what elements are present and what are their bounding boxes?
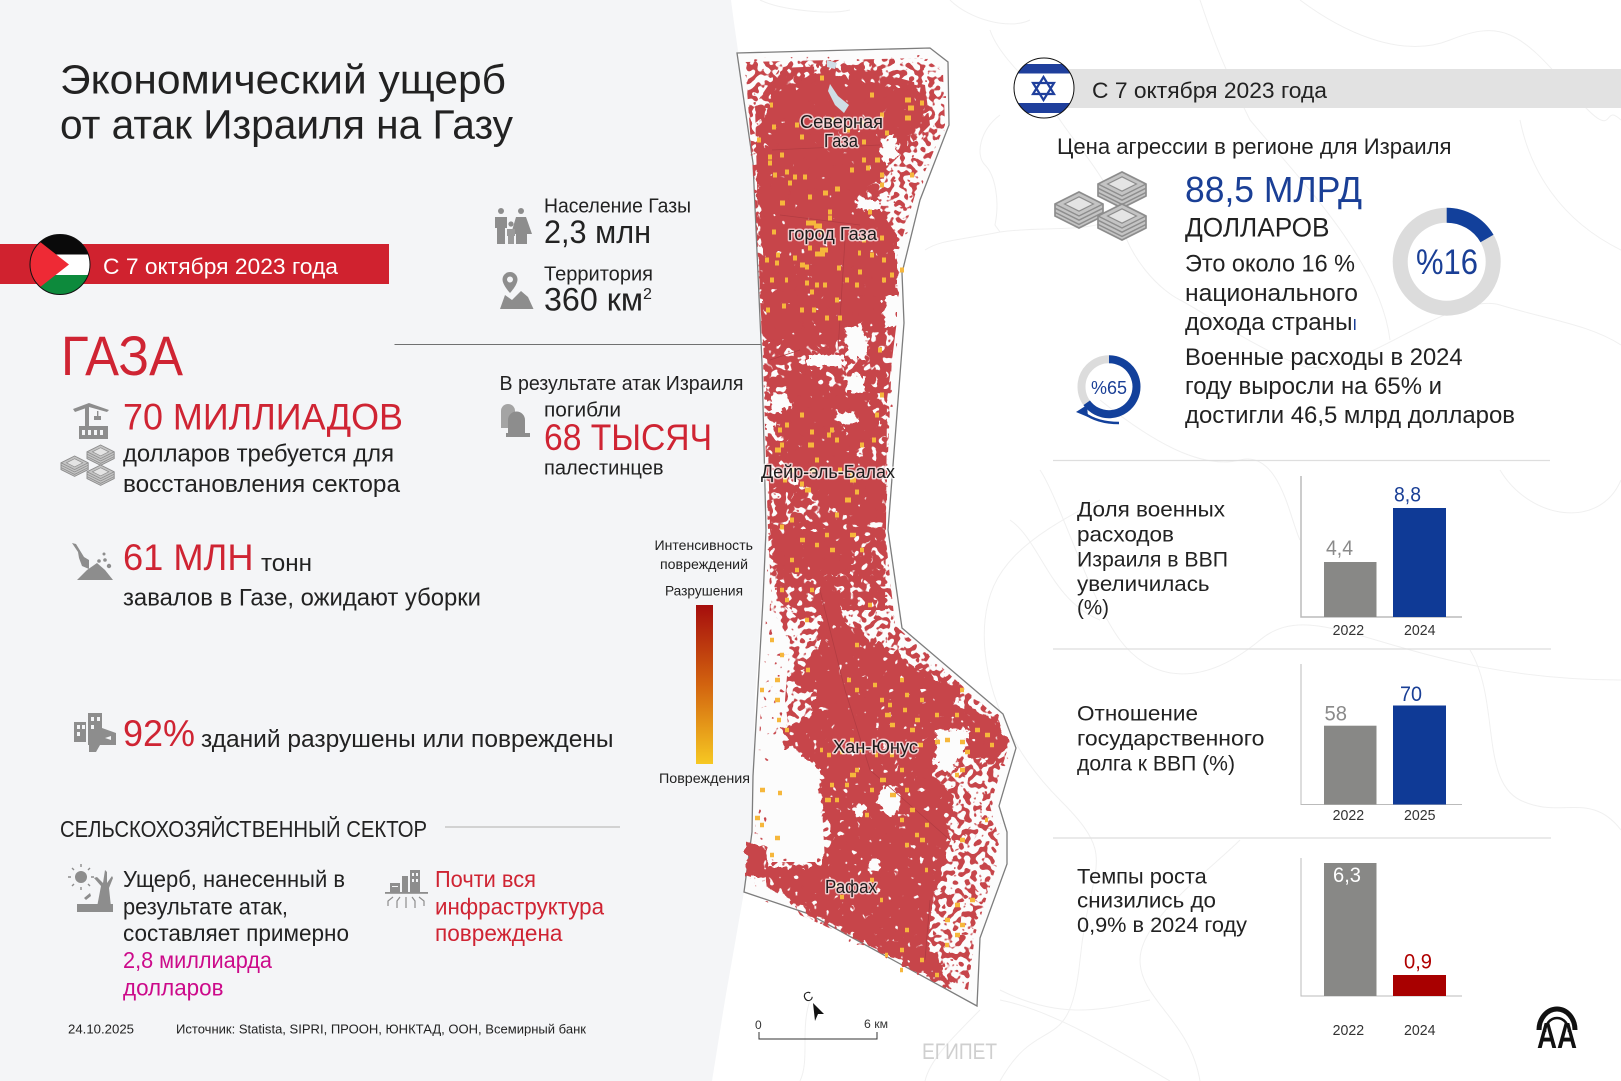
- heading: agricultural sector: СЕЛЬСКОХОЗЯЙСТВЕННЫЙ СЕКТОР: [60, 815, 427, 842]
- stat: buildings destroyed: [123, 713, 614, 754]
- donut chart: 65 percent: %65: [1091, 378, 1127, 398]
- title: [60, 56, 513, 148]
- map: Gaza Strip damage: [737, 48, 1016, 1006]
- stat: population: 2,3 млн: [544, 214, 651, 250]
- road traces: [770, 145, 950, 960]
- bar chart: public debt: [1301, 664, 1462, 824]
- stat: 88.5 billion: ДОЛЛАРОВ: [1185, 213, 1330, 243]
- icon: money stacks: [61, 445, 114, 485]
- bar chart: military share of GDP: [1301, 476, 1462, 639]
- legend: damage intensity: повреждений: [660, 556, 748, 572]
- icon: damaged buildings: [74, 713, 116, 752]
- icon: infrastructure: [385, 870, 428, 908]
- stat: deaths: погибли: [544, 399, 621, 422]
- stat: 70 billion: [123, 396, 403, 498]
- text: agricultural damage: Ущерб, нанесенный в: [123, 866, 345, 892]
- stat: 70 billion: долларов требуется для: [123, 440, 394, 468]
- date and source: 24.10.2025: [68, 1022, 134, 1036]
- title: от атак Израиля на Газу: [60, 102, 513, 148]
- legend: damage intensity: [654, 537, 753, 786]
- icon: burnt tree and sun: [68, 864, 113, 912]
- sparse damage layer: [742, 55, 1012, 1000]
- banner: Gaza date: С 7 октября 2023 года: [103, 254, 339, 279]
- stat: territory: 2: [643, 286, 652, 303]
- town labels: город Газа: [788, 224, 878, 244]
- background road map: [760, 0, 1621, 1081]
- divider line: [394, 344, 823, 346]
- stat: deaths: 68 ТЫСЯЧ: [544, 417, 712, 458]
- map scale bar and north arrow: 0: [755, 1018, 762, 1032]
- text: military share of GDP: [1077, 498, 1228, 619]
- text: infrastructure damage: инфраструктура: [435, 893, 604, 919]
- stat: 88.5 billion: 88,5 МЛРД: [1185, 169, 1362, 210]
- title: Экономический ущерб: [60, 56, 506, 102]
- stat: deaths: палестинцев: [544, 456, 664, 480]
- map scale bar and north arrow: С: [801, 988, 815, 1005]
- text: public debt: долга к ВВП (%): [1077, 751, 1235, 775]
- bar chart: growth rate: 6,3: [1333, 864, 1361, 887]
- stat: deaths: В результате атак Израиля: [500, 372, 744, 395]
- icon: location on map: [500, 272, 534, 309]
- text: military share of GDP: (%): [1077, 595, 1109, 619]
- bar chart: military share of GDP: 2024: [1404, 622, 1436, 639]
- bar chart: military share of GDP: 2022: [1333, 622, 1364, 639]
- stat: 70 billion: восстановления сектора: [123, 471, 401, 498]
- map scale bar and north arrow: [755, 988, 888, 1039]
- text: agricultural damage: составляет примерно: [123, 920, 349, 946]
- water bodies: [827, 60, 849, 113]
- stat: rubble: 61 МЛН: [123, 537, 254, 578]
- text: public debt: Отношение: [1077, 702, 1198, 726]
- text: agricultural damage: [123, 866, 349, 1000]
- text: growth rate: 0,9% в 2024 году: [1077, 913, 1247, 937]
- logo: Anadolu Agency: [1537, 1009, 1577, 1056]
- text: military share of GDP: увеличилась: [1077, 572, 1210, 596]
- bar chart: military share of GDP: 4,4: [1326, 537, 1353, 560]
- legend: damage intensity: Повреждения: [659, 770, 750, 786]
- bar chart: public debt: 2025: [1404, 807, 1436, 824]
- stat: population: [544, 194, 691, 250]
- text: growth rate: [1077, 864, 1247, 937]
- stat: rubble: тонн: [261, 550, 312, 577]
- donut chart: 16 percent: %16: [1416, 243, 1478, 282]
- stat: deaths: [500, 372, 744, 480]
- logo: Anadolu Agency: AA: [1537, 1015, 1577, 1056]
- icon: money stacks: [1055, 172, 1146, 240]
- icon: family: [495, 208, 532, 244]
- text: growth rate: Темпы роста: [1077, 864, 1207, 888]
- legend: damage intensity: Разрушения: [665, 582, 743, 598]
- banner: Israel date: С 7 октября 2023 года: [1092, 78, 1328, 103]
- yellow damage markers: [757, 78, 924, 527]
- map outline: [737, 48, 1016, 1006]
- icon: crane and building: [73, 403, 109, 439]
- icon: shovel and rubble: [72, 543, 113, 580]
- stat: 88.5 billion: Это около 16 %: [1185, 251, 1355, 278]
- icon: tombstones: [501, 404, 530, 437]
- icon: Palestinian flag: [30, 234, 90, 296]
- text: agricultural damage: 2,8 миллиарда: [123, 947, 272, 973]
- text: military spending: году выросли на 65% и: [1185, 373, 1442, 400]
- town labels: Газа: [824, 131, 859, 151]
- bar chart: public debt: 58: [1324, 703, 1347, 726]
- banner: Israel date: [1044, 69, 1621, 108]
- banner: Gaza date: [0, 244, 389, 284]
- stat: 88.5 billion: национального: [1185, 280, 1358, 307]
- bar chart: growth rate: [1301, 858, 1462, 1039]
- bar chart: growth rate: 0,9: [1404, 950, 1432, 974]
- text: military share of GDP: расходов: [1077, 522, 1174, 546]
- bar chart: growth rate: 2024: [1404, 1022, 1436, 1039]
- stat: territory: Территория: [544, 262, 653, 286]
- town labels: Хан-Юнус: [833, 737, 918, 757]
- text: agricultural damage: результате атак,: [123, 893, 288, 919]
- stat: rubble: завалов в Газе, ожидают уборки: [123, 584, 481, 612]
- stat: population: Население Газы: [544, 194, 691, 218]
- stat: buildings destroyed: зданий разрушены или повреждены: [201, 726, 614, 753]
- town labels: Рафах: [825, 877, 877, 897]
- text: military share of GDP: Доля военных: [1077, 498, 1225, 522]
- icon: Israeli flag: [1014, 58, 1074, 118]
- left panel background: [0, 0, 767, 1081]
- text: public debt: [1077, 702, 1264, 775]
- stat: 70 billion: 70 МИЛЛИАДОВ: [123, 396, 403, 438]
- date and source: Источник: Statista, SIPRI, ПРООН, ЮНКТАД, ООН, Всемирный банк: [176, 1022, 586, 1036]
- heading: Gaza: ГАЗА: [61, 324, 184, 387]
- core damage layer: [747, 75, 1010, 987]
- text: infrastructure damage: Почти вся: [435, 866, 536, 892]
- stat: territory: [544, 262, 653, 318]
- label: Egypt: ЕГИПЕТ: [922, 1039, 997, 1064]
- bar chart: growth rate: 2022: [1333, 1022, 1364, 1039]
- text: military share of GDP: Израиля в ВВП: [1077, 547, 1228, 571]
- cleared areas: [758, 135, 968, 871]
- donut chart: 16 percent: [1400, 215, 1493, 308]
- town labels: Дейр-эль-Балах: [761, 462, 895, 482]
- text: military spending: достигли 46,5 млрд долларов: [1185, 402, 1515, 429]
- dense damage layer: [755, 65, 930, 620]
- bar chart: public debt: 70: [1400, 683, 1422, 706]
- text: agricultural damage: долларов: [123, 974, 224, 1000]
- text: military spending: Военные расходы в 2024: [1185, 344, 1463, 371]
- bar chart: public debt: 2022: [1333, 807, 1364, 824]
- text: military spending: [1185, 344, 1515, 429]
- heading: cost for Israel: Цена агрессии в регионе для Израиля: [1057, 134, 1452, 159]
- stat: 88.5 billion: [1185, 169, 1362, 336]
- legend: damage intensity: Интенсивность: [654, 537, 753, 553]
- text: infrastructure damage: [435, 866, 604, 946]
- stat: territory: 360 км: [544, 282, 643, 318]
- stat: rubble: [123, 537, 481, 612]
- stat: buildings destroyed: 92%: [123, 713, 195, 754]
- text: public debt: государственного: [1077, 726, 1264, 750]
- text: growth rate: снизились до: [1077, 889, 1216, 913]
- stat: 88.5 billion: дохода страны: [1185, 309, 1352, 336]
- donut chart: 65 percent: [1076, 359, 1136, 423]
- medium damage layer: [745, 58, 1008, 990]
- text: infrastructure damage: повреждена: [435, 920, 563, 946]
- map scale bar and north arrow: 6 км: [864, 1017, 888, 1031]
- town labels: Северная: [800, 112, 883, 132]
- town labels: [761, 112, 918, 897]
- bar chart: military share of GDP: 8,8: [1394, 484, 1421, 507]
